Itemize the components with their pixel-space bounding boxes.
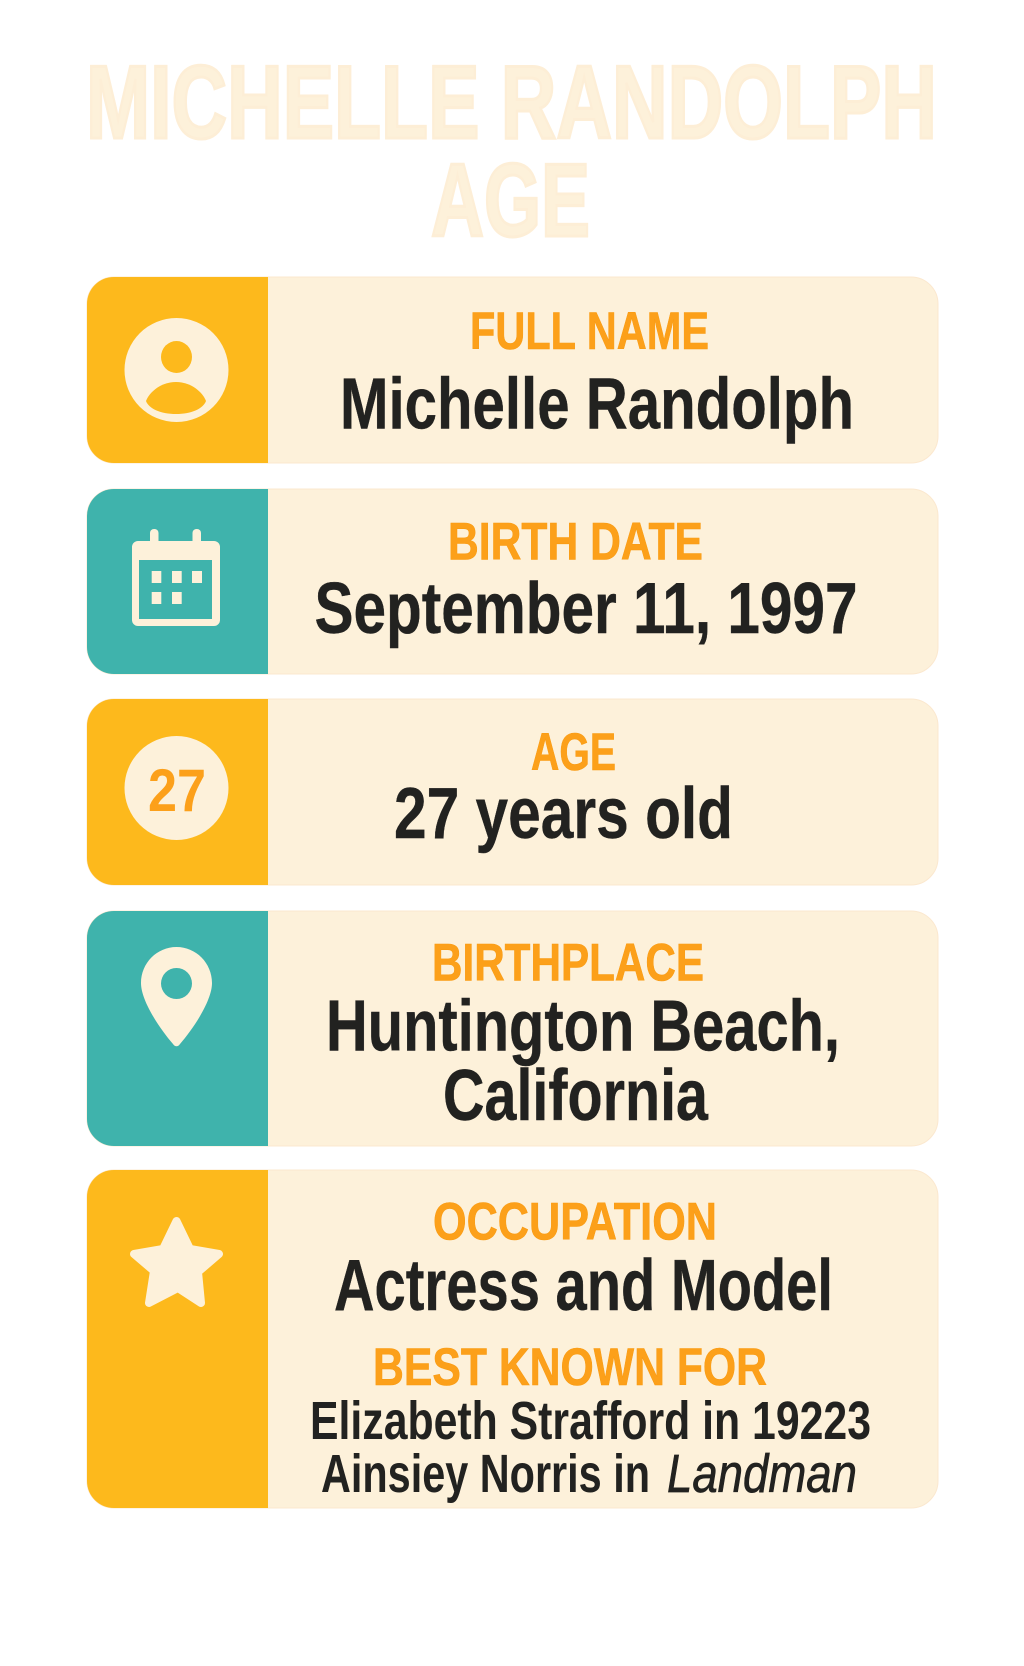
title: AGE: [431, 143, 590, 259]
value: birthplace: [326, 986, 840, 1136]
icon: age badge: [124, 736, 228, 840]
value: birth date: September 11, 1997: [314, 569, 858, 649]
title: [86, 45, 937, 259]
value: age: 27 years old: [394, 774, 733, 854]
value: best known for: [310, 1391, 871, 1504]
label: birth date: BIRTH DATE: [448, 512, 703, 572]
label: best known for: BEST KNOWN FOR: [373, 1338, 767, 1397]
value: full name: Michelle Randolph: [340, 364, 854, 444]
value: occupation: Actress and Model: [334, 1246, 833, 1326]
label: occupation: OCCUPATION: [433, 1192, 717, 1252]
panel: birthplace: [87, 911, 938, 1146]
value: birthplace: Huntington Beach,: [326, 986, 840, 1066]
value: best known for: Ainsiey Norris in: [321, 1444, 650, 1504]
label: age: AGE: [531, 723, 616, 782]
value: birthplace: California: [443, 1056, 709, 1136]
panel: occupation and best known for: [87, 1170, 938, 1508]
label: birthplace: BIRTHPLACE: [432, 934, 704, 992]
icon: star: [134, 1221, 219, 1303]
panel: age: [87, 699, 938, 885]
panel: birth date: [87, 489, 938, 674]
icon: map pin: [141, 947, 212, 1046]
panel: full name: [87, 277, 938, 463]
label: full name: FULL NAME: [470, 302, 709, 361]
value: best known for: Elizabeth Strafford in 19223: [310, 1391, 871, 1451]
icon: person: [124, 318, 228, 422]
value: best known for: Landman: [667, 1444, 857, 1504]
icon: age badge: 27: [148, 757, 206, 824]
icon: calendar: [132, 529, 220, 626]
